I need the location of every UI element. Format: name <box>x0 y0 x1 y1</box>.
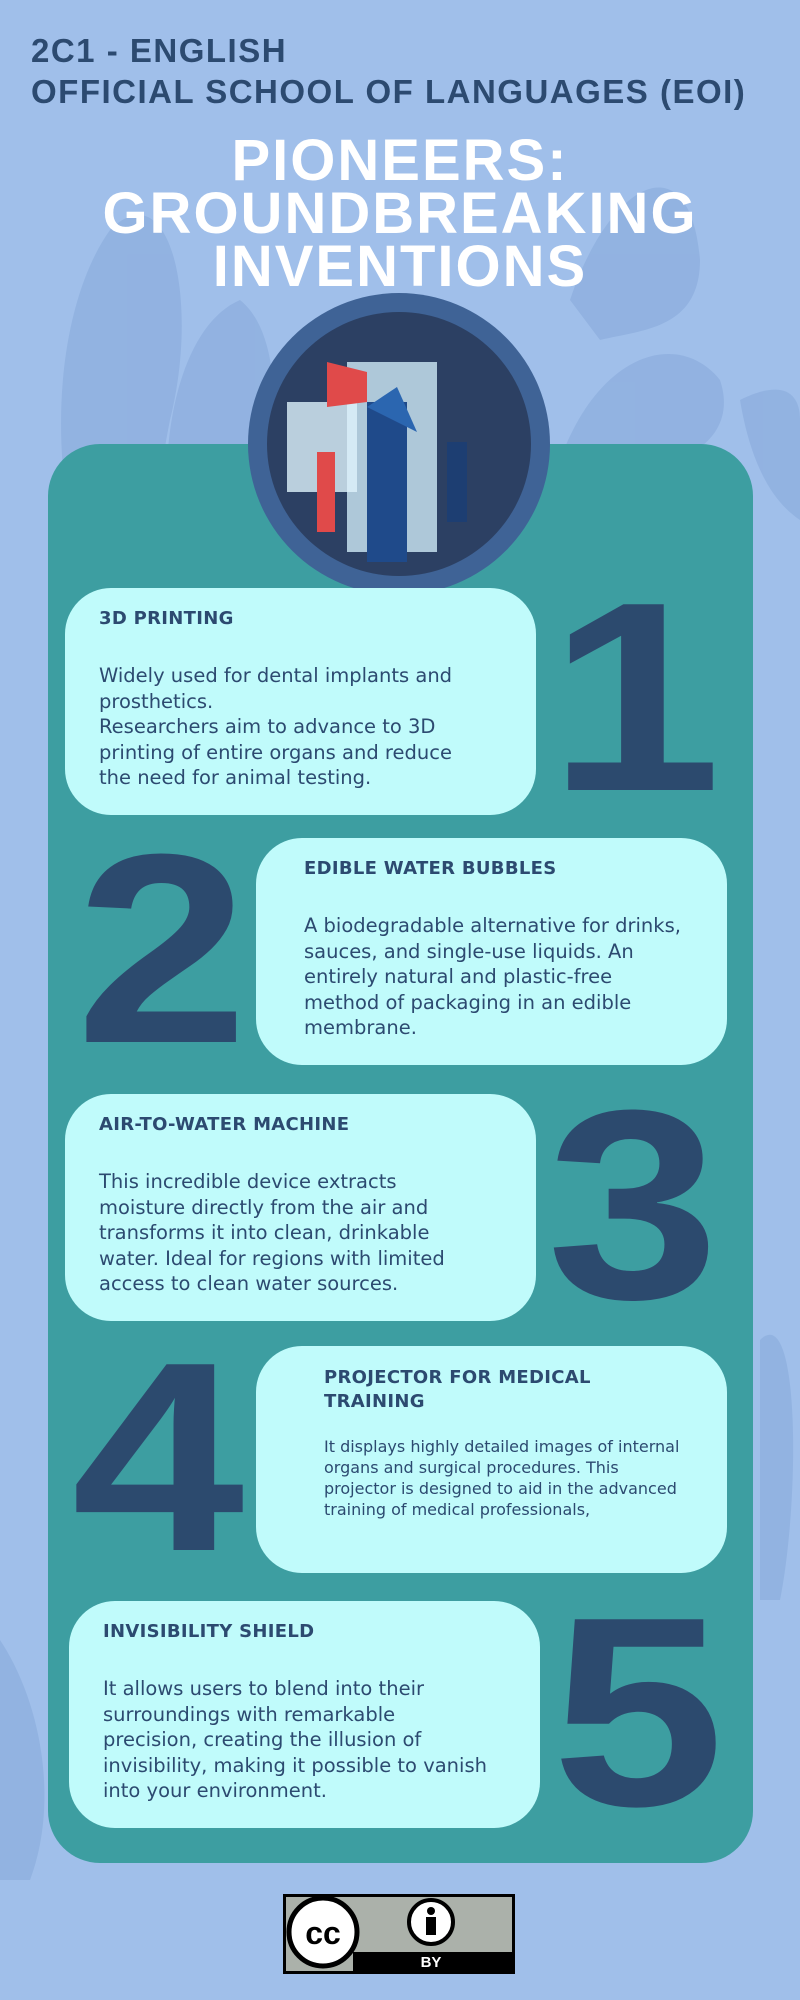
number 1: 1 <box>549 547 721 848</box>
card 2: edible water bubbles <box>256 838 727 1065</box>
number 3: 3 <box>547 1055 719 1356</box>
license badge: CC BY: BY <box>421 1954 441 1971</box>
card 4: projector for medical training <box>256 1346 727 1573</box>
card 4: projector for medical training: PROJECTOR FOR MEDICAL TRAINING <box>324 1367 591 1412</box>
illustration: circular image <box>248 293 550 588</box>
title: GROUNDBREAKING <box>102 181 698 246</box>
header: course info: OFFICIAL SCHOOL OF LANGUAGES (EOI) <box>31 73 746 110</box>
number 2: 2 <box>76 799 248 1100</box>
card 1: 3D printing <box>65 588 536 815</box>
title <box>102 128 698 299</box>
card 5: invisibility shield <box>69 1601 540 1828</box>
card 5: invisibility shield: It allows users to blend into their surroundings with remarkable precision, creating the illusion of invisibility, making it possible to vanish into your environment. <box>103 1677 487 1802</box>
card 3: air-to-water machine <box>65 1094 536 1321</box>
number 5: 5 <box>552 1562 724 1863</box>
card 1: 3D printing: 3D PRINTING <box>99 608 234 629</box>
title: PIONEERS: <box>231 128 569 193</box>
license badge: CC BY: cc <box>305 1915 341 1951</box>
card 1: 3D printing: Researchers aim to advance to 3D printing of entire organs and reduce the need for animal testing. <box>99 715 452 789</box>
card 2: edible water bubbles: EDIBLE WATER BUBBLES <box>304 858 556 879</box>
card 4: projector for medical training: It displays highly detailed images of internal organs and surgical procedures. This projector is designed to aid in the advanced training of medical professionals, <box>324 1437 679 1519</box>
card 1: 3D printing: Widely used for dental implants and prosthetics. <box>99 664 452 712</box>
card 3: air-to-water machine: AIR-TO-WATER MACHINE <box>99 1114 349 1135</box>
number 4: 4 <box>72 1307 244 1608</box>
header: course info <box>31 32 746 110</box>
title: INVENTIONS <box>213 234 587 299</box>
card 3: air-to-water machine: This incredible device extracts moisture directly from the air and transforms it into clean, drinkable water. Ideal for regions with limited access to clean water sources. <box>99 1170 445 1295</box>
license badge: CC BY <box>283 1894 515 1974</box>
card 5: invisibility shield: INVISIBILITY SHIELD <box>103 1621 314 1642</box>
panel: main teal <box>48 444 753 1863</box>
card 2: edible water bubbles: A biodegradable alternative for drinks, sauces, and single-use liquids. An entirely natural and plastic-free method of packaging in an edible membrane. <box>304 914 681 1039</box>
header: course info: 2C1 - ENGLISH <box>31 32 287 69</box>
